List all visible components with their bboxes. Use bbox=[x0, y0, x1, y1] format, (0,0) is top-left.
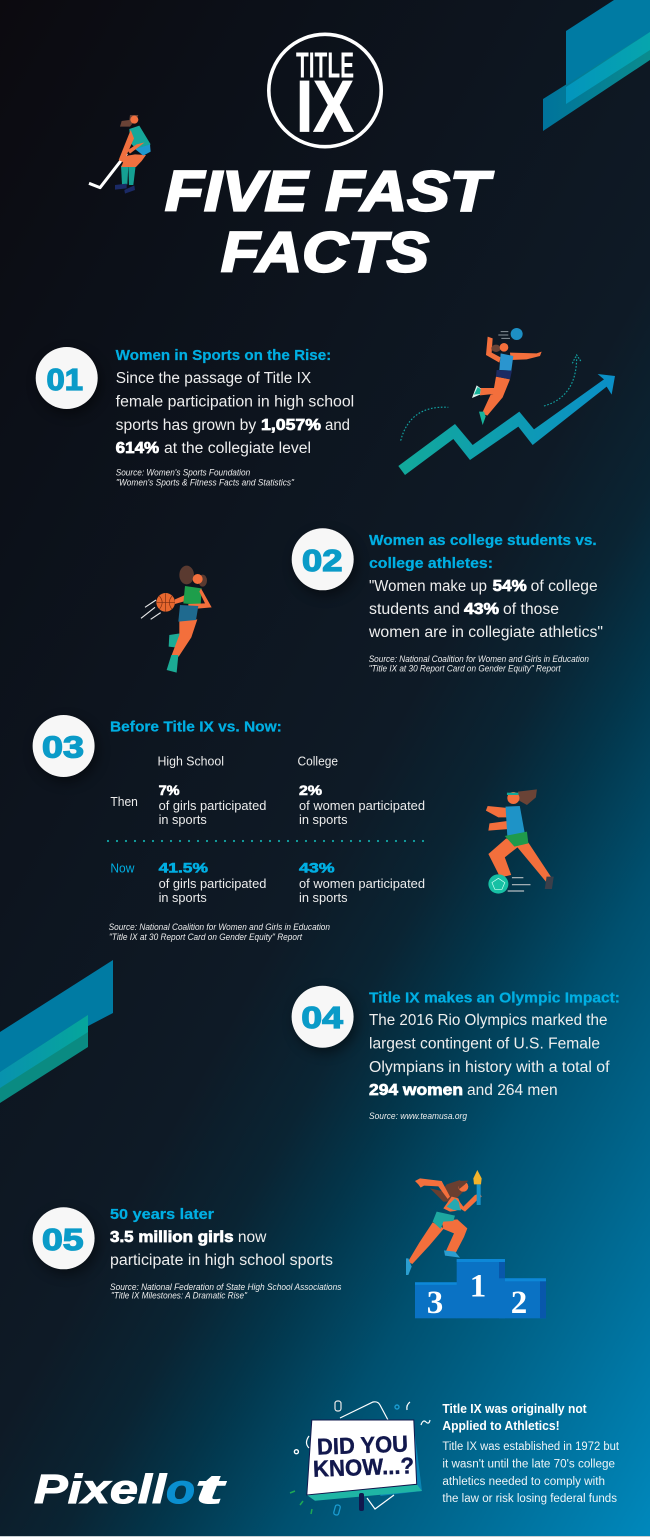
row: now: Now bbox=[110, 861, 135, 876]
illustration: volleyball player on rising arrow bbox=[398, 328, 615, 475]
body text 02: of those bbox=[503, 601, 559, 618]
body text 01: sports has grown by bbox=[116, 417, 256, 434]
number badge 03: 03 bbox=[42, 731, 84, 765]
source 03 bbox=[109, 922, 330, 942]
heading 05: 50 years later bbox=[110, 1206, 214, 1223]
body text 01: female participation in high school bbox=[116, 394, 354, 410]
body text 04: The 2016 Rio Olympics marked the bbox=[369, 1012, 607, 1029]
body text 02: women are in collegiate athletics" bbox=[368, 624, 603, 641]
source 05: "Title IX Milestones: A Dramatic Rise" bbox=[111, 1291, 248, 1301]
body text 05 bbox=[110, 1229, 333, 1269]
row: now bbox=[110, 860, 425, 905]
row: now: in sports bbox=[299, 890, 348, 905]
fact 03 bbox=[33, 715, 554, 942]
number badge 03 bbox=[33, 715, 95, 777]
heading 01: Women in Sports on the Rise: bbox=[116, 347, 331, 364]
number badge 04 bbox=[292, 986, 354, 1048]
body text 01: and bbox=[325, 417, 350, 434]
column headers: College bbox=[298, 754, 338, 769]
source 05 bbox=[110, 1282, 342, 1301]
illustration: runner with torch bbox=[406, 1170, 482, 1275]
illustration: podium: 1 bbox=[470, 1269, 486, 1305]
row: then: 7% bbox=[159, 782, 180, 798]
fact 05 bbox=[33, 1170, 546, 1321]
body text 04: and 264 men bbox=[467, 1082, 558, 1099]
number badge 02: 02 bbox=[302, 544, 342, 578]
did you know heading: Title IX was originally not bbox=[442, 1402, 587, 1416]
illustration: did you know sign: DID YOU bbox=[317, 1431, 408, 1460]
heading 04: Title IX makes an Olympic Impact: bbox=[369, 989, 620, 1006]
source 01: "Women's Sports & Fitness Facts and Statistics" bbox=[116, 478, 295, 488]
number badge 05 bbox=[33, 1207, 95, 1269]
heading 03: Before Title IX vs. Now: bbox=[110, 719, 282, 736]
logo: Pixellot: o bbox=[166, 1466, 195, 1512]
did you know heading: Applied to Athletics! bbox=[442, 1419, 560, 1433]
row: then: in sports bbox=[299, 812, 348, 827]
body text 02 bbox=[368, 578, 603, 641]
comparison table bbox=[108, 754, 427, 905]
body text 05: 3.5 million girls bbox=[110, 1229, 234, 1246]
source 05: Source: National Federation of State High School Associations bbox=[110, 1282, 342, 1292]
column headers bbox=[158, 754, 338, 769]
body text 01: Since the passage of Title IX bbox=[116, 370, 312, 387]
logo: Title IX: TITLE bbox=[296, 44, 354, 85]
heading 02: Women as college students vs. bbox=[369, 532, 597, 549]
source 04: Source: www.teamusa.org bbox=[369, 1111, 467, 1121]
logo: Pixellot: Pixell bbox=[34, 1466, 168, 1512]
number badge 05: 05 bbox=[42, 1223, 84, 1257]
illustration: soccer player bbox=[486, 789, 554, 894]
title bbox=[165, 160, 494, 284]
body text 01: at the collegiate level bbox=[164, 440, 311, 457]
body text 02: students and bbox=[369, 601, 460, 618]
row: then: in sports bbox=[159, 812, 207, 827]
fact 02 bbox=[141, 528, 603, 674]
decorative shapes: top right bbox=[543, 0, 650, 131]
source 01: Source: Women's Sports Foundation bbox=[116, 468, 250, 478]
illustration: podium: 3 bbox=[427, 1285, 443, 1321]
did you know body: athletics needed to comply with bbox=[442, 1476, 605, 1488]
row: now: 43% bbox=[299, 860, 335, 876]
did you know heading bbox=[442, 1402, 587, 1433]
fact 04 bbox=[292, 986, 620, 1121]
row: then: of girls participated bbox=[159, 798, 266, 813]
illustration: basketball player bbox=[141, 566, 212, 673]
title: FACTS bbox=[221, 220, 429, 284]
logo: Pixellot bbox=[34, 1466, 228, 1512]
title: FIVE FAST bbox=[165, 160, 494, 224]
number badge 04: 04 bbox=[301, 1001, 343, 1035]
logo: Title IX: IX bbox=[296, 67, 354, 148]
number badge 01 bbox=[36, 347, 98, 409]
illustration: did you know sign: KNOW...? bbox=[313, 1452, 414, 1482]
body text 04: largest contingent of U.S. Female bbox=[369, 1036, 600, 1052]
source 02: Source: National Coalition for Women and Girls in Education bbox=[369, 654, 589, 664]
fact 01 bbox=[36, 328, 615, 488]
row: then: 2% bbox=[299, 782, 323, 798]
body text 04: 294 women bbox=[369, 1082, 463, 1099]
illustration: did you know sign bbox=[290, 1401, 430, 1515]
body text 02: of college bbox=[531, 578, 598, 595]
number badge 01: 01 bbox=[46, 363, 83, 397]
did you know body: the law or risk losing federal funds bbox=[442, 1493, 617, 1505]
did you know body bbox=[442, 1441, 620, 1505]
body text 04 bbox=[369, 1012, 610, 1099]
body text 01: 1,057% bbox=[261, 417, 321, 434]
number badge 02 bbox=[292, 528, 354, 590]
body text 04: Olympians in history with a total of bbox=[369, 1059, 610, 1076]
illustration: podium: 2 bbox=[511, 1285, 527, 1321]
body text 01 bbox=[116, 370, 354, 457]
row: then: Then bbox=[110, 794, 138, 809]
body text 01: 614% bbox=[116, 440, 159, 457]
row: now: of girls participated bbox=[159, 876, 266, 891]
source 03: "Title IX at 30 Report Card on Gender Equity" Report bbox=[109, 932, 303, 942]
source 02: "Title IX at 30 Report Card on Gender Equity" Report bbox=[369, 664, 561, 674]
heading 02: college athletes: bbox=[369, 555, 493, 572]
column headers: High School bbox=[158, 754, 224, 769]
body text 02: 43% bbox=[464, 601, 499, 618]
row: then bbox=[110, 782, 425, 827]
body text 02: "Women make up bbox=[369, 578, 487, 595]
body text 02: 54% bbox=[493, 578, 527, 595]
heading 02 bbox=[369, 532, 597, 572]
row: then: of women participated bbox=[299, 798, 425, 813]
illustration: podium bbox=[415, 1259, 546, 1321]
logo: Title IX bbox=[269, 34, 381, 148]
body text 05: participate in high school sports bbox=[110, 1252, 333, 1269]
source 03: Source: National Coalition for Women and Girls in Education bbox=[109, 922, 330, 932]
did you know body: it wasn't until the late 70's college bbox=[442, 1458, 615, 1470]
source 02 bbox=[369, 654, 589, 674]
icon: field hockey player bbox=[89, 115, 151, 194]
row: now: 41.5% bbox=[159, 860, 209, 876]
row: now: of women participated bbox=[299, 876, 425, 891]
logo: Pixellot: t bbox=[195, 1466, 228, 1512]
source 01 bbox=[116, 468, 295, 488]
did you know body: Title IX was established in 1972 but bbox=[442, 1441, 620, 1453]
body text 05: now bbox=[238, 1229, 267, 1246]
decorative shapes: left bbox=[0, 960, 113, 1103]
did you know text bbox=[442, 1402, 620, 1505]
row: now: in sports bbox=[159, 890, 207, 905]
